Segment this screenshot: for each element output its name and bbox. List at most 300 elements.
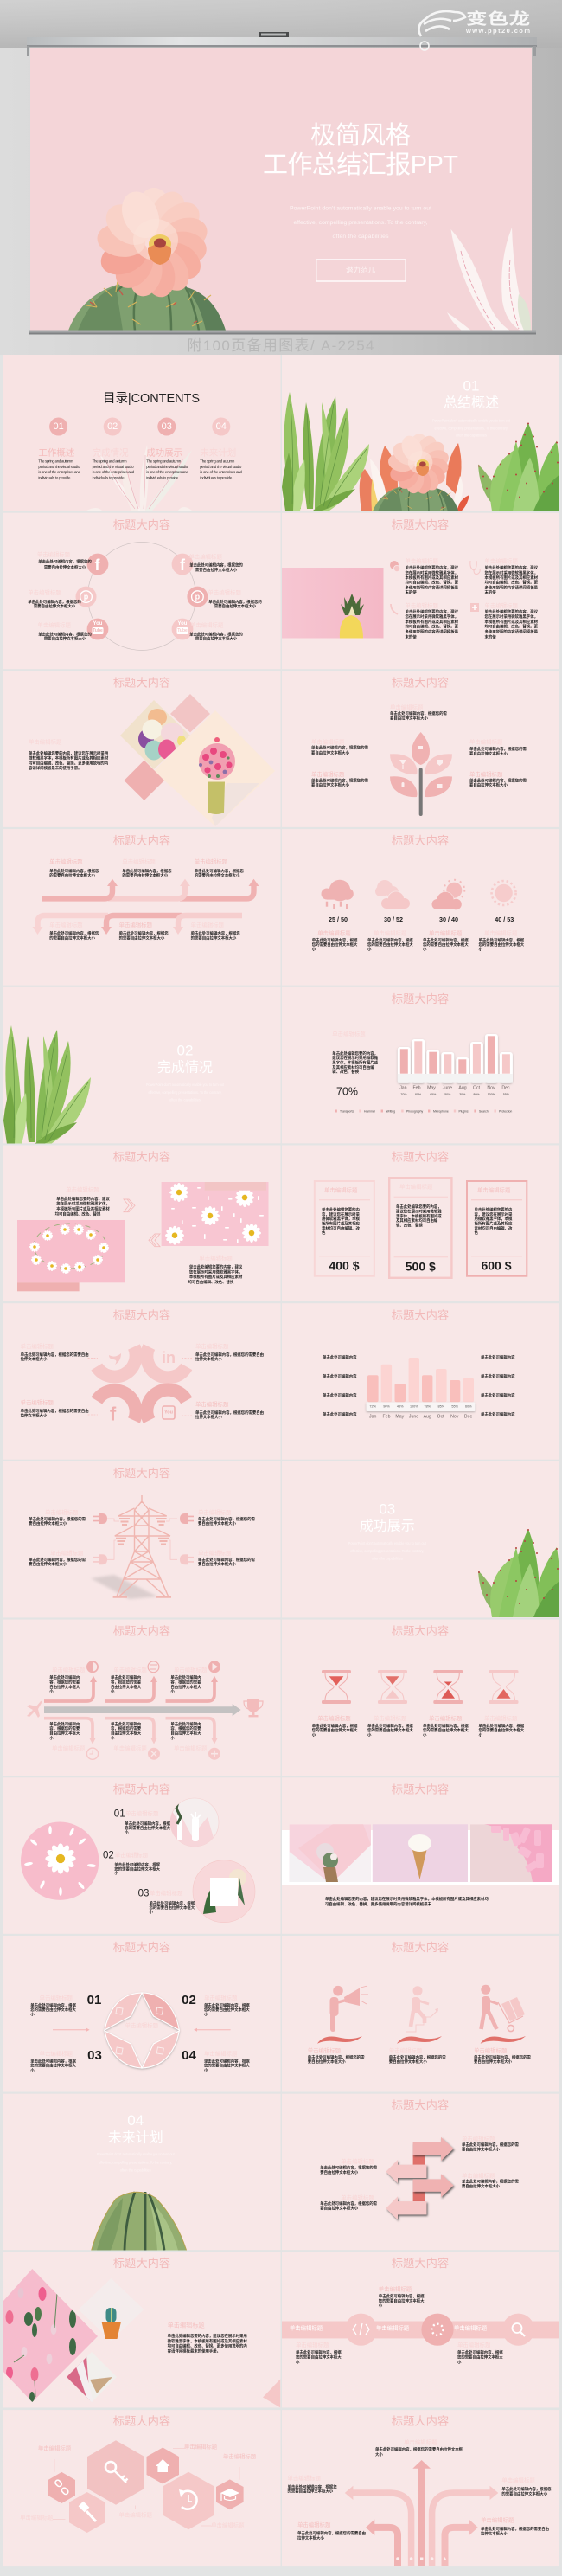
title: 工作总结汇报PPT — [263, 151, 458, 179]
text block: 单击编辑标题 — [29, 737, 62, 746]
text lower 2 — [111, 1721, 147, 1751]
item 01: individuals to provide — [38, 475, 71, 479]
percent labels: 100% — [488, 1093, 496, 1096]
text 1: 要自由拉伸文本框大小 — [308, 2059, 346, 2065]
title: 标题大内容 — [113, 517, 170, 531]
icon: youtube left — [87, 619, 108, 639]
text upper 2: 的需要自由拉伸文本框大小 — [122, 872, 169, 878]
percent labels: 65% — [430, 1093, 437, 1096]
text upper 1: 容，根据您的需要 — [49, 1679, 80, 1686]
text upper 3: 自由拉伸文本框大 — [170, 1684, 201, 1690]
text lower 3: 单击编辑标题 — [174, 1744, 208, 1751]
text left lower: 要自由拉伸文本框大小 — [311, 782, 350, 787]
text 1: 单击编辑标题 — [317, 929, 351, 936]
note 2: 单击此处编辑您要的内容，建议 — [484, 564, 539, 571]
card 400: 用微软雅黑字体，本模 — [322, 1216, 361, 1222]
note 1: 单击编辑标题 — [405, 557, 438, 564]
left notes: 单击此处可编辑内容 — [323, 1411, 357, 1417]
month labels: Feb — [413, 1085, 421, 1090]
arrow center — [412, 2460, 431, 2566]
text lower left: 小 — [296, 2359, 300, 2366]
item 03: 成功展示 — [146, 448, 182, 459]
panel: pineapple photo and four notes — [282, 513, 559, 669]
note 1: 末的使 — [405, 589, 417, 595]
photo: daisy wreath — [17, 1220, 125, 1282]
numbers: 01 — [87, 1993, 101, 2007]
illustration: white aloe leaves — [447, 228, 531, 331]
panel: 3D arrows — [282, 2094, 559, 2250]
band — [282, 2321, 559, 2338]
text top — [390, 703, 447, 722]
section heading: effective, compelling presentations. To the contrary, — [99, 2160, 172, 2164]
item 01: 小 — [125, 1829, 129, 1835]
section heading — [97, 2112, 175, 2172]
item 01: 工作概述 — [38, 447, 75, 459]
arrow lower left — [366, 2520, 398, 2566]
section heading: 01 — [463, 377, 479, 395]
panel: section 04 — [3, 2094, 280, 2250]
month labels: Feb — [383, 1415, 391, 1420]
text bottom right — [195, 1400, 264, 1420]
text top left: 要自由拉伸文本框大小 — [29, 1520, 67, 1526]
text bottom left: 单击编辑标题 — [21, 1398, 54, 1406]
percent labels: 55% — [503, 1093, 510, 1096]
text 4 — [479, 929, 525, 952]
text upper 1 — [49, 858, 99, 878]
card 500: 500 $ — [406, 1259, 436, 1273]
text upper 1: 小 — [49, 1688, 54, 1694]
value labels: 45% — [397, 1405, 404, 1409]
icon: person climbing stairs — [406, 1986, 438, 2032]
text 2: 小 — [367, 1732, 372, 1738]
text lower 2: 单击编辑标题 — [119, 921, 153, 928]
lobe icons — [116, 2007, 163, 2054]
title: 标题大内容 — [392, 2097, 449, 2111]
panel: power tower — [3, 1461, 280, 1617]
note 3: 均可自由编辑、改色、替换。更 — [405, 623, 459, 630]
note 2: 多使用说明的内容请详阅模板最 — [484, 585, 539, 590]
title: 标题大内容 — [113, 1466, 170, 1480]
text top: 单击此处可编辑内容，根据您的需要自由拉伸文本框 — [375, 2446, 463, 2452]
text upper: 均可自由编辑、改色、替换 — [55, 1211, 101, 1217]
photo: daisy circle — [21, 1822, 99, 1900]
text bottom right: 单击此处可编辑内容，根据您的需 — [198, 1557, 255, 1563]
hourglass 4 — [489, 1670, 519, 1704]
item 02: 您的需要自由拉伸文本框大 — [114, 1866, 161, 1873]
text 2: 单击此处可编辑内容，根据您的需 — [389, 2054, 446, 2060]
labels — [20, 2442, 257, 2528]
text lower: 单击此处编辑您要的内容，建议 — [189, 1263, 243, 1270]
icon: clock — [86, 1748, 99, 1759]
text block middle left: 单击此处可编辑内容，根据您的 — [28, 599, 81, 605]
note 4: 本模板所有图片或及其相应素材 — [484, 619, 539, 625]
text 2: 您的需要自由拉伸文本框大 — [367, 941, 413, 948]
panel: hexagons — [3, 2410, 280, 2566]
text block middle right: 单击编辑标题 — [208, 588, 241, 596]
labels: 单击编辑标题 — [223, 2452, 257, 2460]
section heading: PowerPoint don't automatically enable you to turn out — [97, 2152, 175, 2156]
text bottom left — [21, 1398, 89, 1419]
text block bottom right: 单击此处可编辑内容，根据您的 — [189, 632, 243, 637]
text 4: 您的需要自由拉伸文本框大 — [479, 941, 525, 948]
text upper 1: 单击编辑标题 — [52, 1666, 86, 1673]
text right: 单击编辑标题 — [501, 2476, 535, 2483]
title: 标题大内容 — [113, 675, 170, 689]
month labels: Aug — [458, 1085, 467, 1090]
panel: people icons — [282, 1936, 559, 2092]
arc with youtube icon: You — [164, 1410, 173, 1416]
illustration: cactus dome — [92, 2192, 187, 2250]
text top right: 拉伸文本框大小 — [195, 1356, 222, 1362]
rail: top bar of projector screen — [27, 32, 537, 56]
text lower 3: 小 — [170, 1735, 175, 1741]
text top right: 单击编辑标题 — [198, 1508, 232, 1516]
text block middle right — [208, 588, 262, 609]
text 3: 小 — [423, 1732, 427, 1738]
text 4: 单击此处可编辑内容，根据 — [479, 1723, 525, 1729]
month labels: Dec — [464, 1415, 473, 1420]
left notes: 单击此处可编辑内容 — [323, 1392, 357, 1398]
caption: 附100页备用图表/ A-2254 — [187, 337, 374, 354]
text block middle left — [28, 588, 81, 609]
text block: 及其相应素材均可自由编 — [332, 1064, 374, 1070]
text 1: 单击此处可编辑内容，根据 — [312, 1723, 358, 1729]
band above photo — [205, 1182, 266, 1191]
panel: weather icons — [282, 829, 559, 986]
stat 70%: 70% — [336, 1085, 358, 1097]
hexagon: house — [147, 2447, 179, 2483]
arrow 2 left — [386, 2160, 426, 2183]
card 400: 单击此处编辑您要的内 — [322, 1206, 361, 1213]
item 01: 01 — [114, 1809, 125, 1820]
icon: magnifier — [502, 2314, 534, 2346]
icon: two clouds — [375, 880, 410, 909]
text upper 3: 容，根据您的需要 — [170, 1679, 201, 1686]
panel: diamond photos — [3, 671, 280, 827]
text upper 2: 单击编辑标题 — [122, 858, 156, 865]
text 3: 要自由拉伸文本框大小 — [474, 2059, 513, 2065]
band labels: 单击编辑标题 — [454, 2323, 488, 2331]
text block: 单击此处编辑您要的内容，建议您在展示时采用 — [29, 750, 108, 756]
text left lower — [311, 770, 368, 787]
lower arrows — [38, 915, 242, 929]
leaf middle left — [390, 754, 417, 774]
upper flow 1 — [44, 1676, 97, 1701]
note 2: 末的使 — [484, 589, 496, 595]
icon: chevrons left — [149, 1234, 160, 1247]
text right lower: 单击编辑标题 — [469, 770, 503, 778]
arrow 1 right — [413, 2137, 453, 2161]
upper arrows — [42, 883, 254, 898]
text bottom left — [29, 1549, 86, 1567]
text 01: 您的需要自由拉伸文本框大 — [30, 2007, 76, 2013]
text lower 1: 小 — [49, 1735, 54, 1741]
item 04: The spring and autumn — [200, 459, 235, 463]
icon: sun behind cloud — [432, 880, 464, 909]
text upper: 本模板所有图片或及其相应素材 — [56, 1206, 110, 1211]
hexagon: history — [163, 2472, 214, 2529]
text top left: 单击编辑标题 — [21, 1342, 54, 1350]
note 1 — [405, 557, 459, 595]
caption text — [325, 1896, 489, 1907]
panel: contents — [3, 355, 280, 511]
text bottom right — [198, 1549, 255, 1567]
text lower 3: 自由拉伸文本框大 — [170, 1731, 201, 1736]
text bottom left: 拉伸文本框大小 — [21, 1412, 48, 1419]
connector 2 — [413, 2192, 425, 2201]
card 400: 素材均可自由编辑、改 — [322, 1225, 361, 1231]
percent labels: 80% — [415, 1093, 422, 1096]
text left upper: 单击编辑标题 — [311, 737, 345, 746]
text 04: 您的需要自由拉伸文本框大 — [204, 2063, 250, 2068]
icon: chevrons right — [124, 1199, 135, 1212]
hourglass 2 — [378, 1670, 407, 1704]
photo: marshmallows — [470, 1824, 553, 1882]
text 02: 单击编辑标题 — [204, 1994, 238, 2001]
hexagon: graduation cap — [216, 2479, 244, 2509]
text upper 3: 单击此处可编辑内 — [170, 1674, 201, 1680]
item 03: 03 — [162, 421, 172, 432]
arc with linkedin icon — [147, 1346, 187, 1378]
text right upper: 单击此处可编辑内容，根据您的需 — [469, 746, 527, 752]
text lower 2: 自由拉伸文本框大 — [111, 1731, 142, 1736]
text left lower: 要自由拉伸文本框大小 — [320, 2205, 359, 2212]
text upper: 您在展示时采用微软雅黑字体， — [56, 1201, 110, 1206]
note icon 1 — [390, 561, 400, 572]
note 3: 您在展示时采用微软雅黑字体， — [405, 613, 458, 620]
upper flow 3 — [166, 1676, 218, 1701]
temperatures: 30 / 52 — [384, 915, 403, 923]
text 03: 您的需要自由拉伸文本框大 — [30, 2063, 76, 2068]
section heading — [348, 1500, 426, 1561]
text top — [379, 2284, 425, 2309]
text block: 黑字体，本模板所有图片或 — [332, 1059, 379, 1066]
month labels — [369, 1415, 473, 1420]
text block — [29, 737, 109, 771]
month labels: Nov — [487, 1085, 495, 1090]
value labels: 60% — [465, 1405, 472, 1409]
item 04 — [200, 417, 242, 479]
panel: leaf tree — [282, 671, 559, 827]
labels: 单击编辑标题 — [119, 2511, 152, 2518]
text 3 — [423, 929, 469, 952]
text lower left: 单击此处可编辑内容，根据 — [296, 2349, 342, 2355]
text upper 1: 单击此处可编辑内容，根据您 — [49, 868, 99, 874]
photo: balloons diamond — [120, 700, 190, 769]
text lower left: 拉伸文本框大小 — [297, 2535, 324, 2541]
connectors — [88, 1358, 192, 1416]
title: 标题大内容 — [113, 2256, 170, 2270]
illustration: cactus with flower — [373, 433, 459, 512]
month labels: May — [395, 1415, 405, 1420]
text 2: 单击此处可编辑内容，根据 — [367, 1723, 413, 1729]
text top left — [21, 1342, 89, 1362]
text right — [501, 2476, 552, 2497]
text lower 3: 单击此处可编辑内容，根据您 — [191, 930, 240, 936]
arrow base icons — [396, 2557, 447, 2560]
item 01: The spring and autumn — [38, 459, 73, 463]
text upper 3: 小 — [170, 1688, 175, 1694]
text right lower: 单击此处可编辑内容，根据您的需 — [462, 2179, 519, 2185]
icon: trophy — [244, 1699, 263, 1717]
item 02: 单击编辑标题 — [115, 1851, 149, 1859]
text left upper — [311, 737, 368, 756]
text 3: 单击编辑标题 — [429, 929, 463, 936]
text 1: 小 — [312, 947, 316, 952]
section heading: PowerPoint don't automatically enable you to turn out — [348, 1541, 426, 1545]
panel: hourglasses — [282, 1620, 559, 1776]
icon: sun — [492, 881, 516, 905]
text lower right: 单击此处可编辑内容，根据 — [457, 2349, 503, 2355]
text 2: 单击编辑标题 — [374, 1714, 407, 1722]
title: 标题大内容 — [392, 1307, 449, 1321]
card 500: 单击编辑标题 — [399, 1182, 433, 1191]
text 2: 您的需要自由拉伸文本框大 — [367, 1727, 413, 1733]
text block bottom right: 需要自由拉伸文本框大小 — [195, 635, 238, 642]
text left lower: 单击编辑标题 — [311, 770, 345, 778]
text block middle right: 单击此处可编辑内容，根据您的 — [208, 599, 262, 605]
text block middle left: 单击编辑标题 — [28, 588, 61, 596]
item 02: The spring and autumn — [93, 459, 127, 463]
item 02: 完成情况 — [93, 447, 129, 459]
item 03: 单击编辑标题 — [150, 1889, 183, 1897]
text upper 3: 单击编辑标题 — [195, 858, 228, 865]
hexagon: gavel — [69, 2492, 105, 2533]
lower arrow heads — [33, 927, 183, 935]
note 1: 本模板所有图片或及其相应素材 — [405, 575, 459, 581]
text upper — [55, 1185, 110, 1217]
text block bottom left: 单击此处可编辑内容，根据您的 — [38, 632, 92, 637]
text lower right: 您的需要自由拉伸文本框大 — [457, 2354, 503, 2361]
card 400 — [315, 1181, 374, 1276]
panel: road arrows — [282, 2410, 559, 2566]
text top: 要自由拉伸文本框大小 — [390, 715, 429, 722]
text 03: 单击此处可编辑内容，根据 — [30, 2058, 76, 2065]
note 4: 多使用说明的内容请详阅模板最 — [484, 628, 539, 635]
card 500: 黑字体，本模板所有图片或 — [396, 1213, 442, 1219]
text 03 — [30, 2049, 76, 2073]
text upper 1: 自由拉伸文本框大 — [49, 1684, 80, 1690]
text block middle right: 需要自由拉伸文本框大小 — [214, 603, 257, 609]
item 04: 04 — [216, 421, 227, 432]
plug wires — [107, 1519, 177, 1559]
left notes: 单击此处可编辑内容 — [323, 1354, 357, 1360]
text upper 2: 小 — [111, 1688, 115, 1694]
wave 3 — [481, 2036, 526, 2044]
text upper 2 — [111, 1666, 147, 1694]
text 1 — [312, 1714, 358, 1738]
text upper 2: 单击此处可编辑内 — [111, 1674, 142, 1680]
photo: scattered daisies — [162, 1182, 268, 1246]
section heading: 未来计划 — [108, 2130, 163, 2146]
card 600: 600 $ — [481, 1258, 512, 1272]
card 500: 建议您在展示时采用微软雅 — [396, 1208, 442, 1215]
white strip — [282, 1830, 559, 1885]
legend: Writing — [386, 1109, 395, 1113]
card 400: 单击编辑标题 — [324, 1185, 358, 1194]
illustration: green leaves — [3, 1025, 91, 1144]
temperatures — [329, 915, 514, 923]
note 1: 均可自由编辑、改色、替换。更 — [405, 580, 459, 586]
text lower 1: 自由拉伸文本框大 — [49, 1731, 80, 1736]
tower — [113, 1495, 171, 1597]
text 3: 单击此处可编辑内容，根据 — [423, 1723, 469, 1729]
text left upper: 单击此处可编辑内容，根据您的需 — [311, 744, 368, 751]
note icon 2: stethoscope — [470, 561, 480, 575]
text top: 小 — [379, 2303, 383, 2309]
panel: section 03 — [282, 1461, 560, 1617]
text upper 3 — [195, 858, 244, 878]
photo: bouquet — [290, 1824, 371, 1882]
arrow left — [53, 2028, 90, 2032]
item 03: 您的需要自由拉伸文本框大 — [149, 1905, 195, 1911]
title: 标题大内容 — [392, 992, 449, 1005]
percent labels: 80% — [473, 1093, 480, 1096]
numbers — [87, 1993, 196, 2063]
panel: flow arrows — [3, 829, 280, 986]
card 500: 及其相应素材均可自由编 — [396, 1217, 438, 1224]
text top right: 单击此处可编辑内容，根据您的需要自由 — [195, 1352, 264, 1358]
text block: 容请详阅模板最末的使用手册。 — [168, 2348, 220, 2354]
text 4 — [479, 1714, 525, 1738]
card 600: 单击此处编辑您要的内 — [474, 1206, 513, 1213]
labels: 单击编辑标题 — [211, 2521, 245, 2528]
lower flow 1 — [44, 1718, 96, 1744]
value labels: 85% — [437, 1405, 445, 1409]
note 2: 单击编辑标题 — [484, 557, 518, 564]
leaf middle right — [425, 754, 452, 774]
text upper 2: 自由拉伸文本框大 — [111, 1684, 142, 1690]
section heading: often the capabilities — [372, 1556, 404, 1561]
card 600: 板所有图片或及其相应 — [474, 1220, 513, 1227]
text lower 1: 单击此处可编辑内 — [49, 1721, 80, 1727]
text 1: 小 — [312, 1732, 316, 1738]
left notes: 单击此处可编辑内容 — [323, 1373, 357, 1379]
illustration: green leaves — [282, 392, 369, 511]
text top right: 单击此处可编辑内容，根据您的需 — [198, 1516, 255, 1522]
text top right: 要自由拉伸文本框大小 — [198, 1520, 237, 1526]
text left: 单击此处可编辑内容，根据您 — [287, 2483, 337, 2489]
text upper 1 — [49, 1666, 86, 1694]
subtitle text — [290, 206, 431, 240]
month labels: Aug — [424, 1415, 431, 1420]
text block top right — [188, 552, 243, 573]
text left lower: 单击此处可编辑内容，根据您的需 — [311, 777, 368, 784]
band labels: 单击编辑标题 — [376, 2323, 410, 2331]
text 01: 单击此处可编辑内容，根据 — [30, 2002, 76, 2008]
section heading: often the capabilities — [120, 2168, 151, 2172]
text 04 — [204, 2049, 250, 2073]
text block top left: 需要自由拉伸文本框大小 — [44, 564, 86, 570]
month labels: Oct — [473, 1085, 481, 1090]
text lower: 您在展示时采用微软雅黑字体， — [189, 1269, 242, 1275]
item 03: is one of the enterprises and — [146, 470, 188, 474]
text lower 3: 单击编辑标题 — [191, 921, 225, 928]
arrow 4 left — [386, 2196, 426, 2219]
note 4: 末的使 — [484, 633, 496, 640]
text block bottom left: 单击编辑标题 — [38, 621, 71, 628]
panel: circular photos — [3, 1777, 280, 1934]
text 4: 小 — [479, 947, 482, 952]
icon: plus — [208, 1748, 220, 1760]
labels: 单击编辑标题 — [38, 2444, 72, 2452]
item 01: period and the visual studio — [38, 465, 80, 469]
text 2: 单击编辑标题 — [389, 2046, 423, 2054]
photo: roses diamond — [3, 2269, 98, 2402]
text top left — [29, 1508, 86, 1526]
title: 极简风格 — [310, 121, 411, 150]
title: 标题大内容 — [392, 1624, 449, 1638]
